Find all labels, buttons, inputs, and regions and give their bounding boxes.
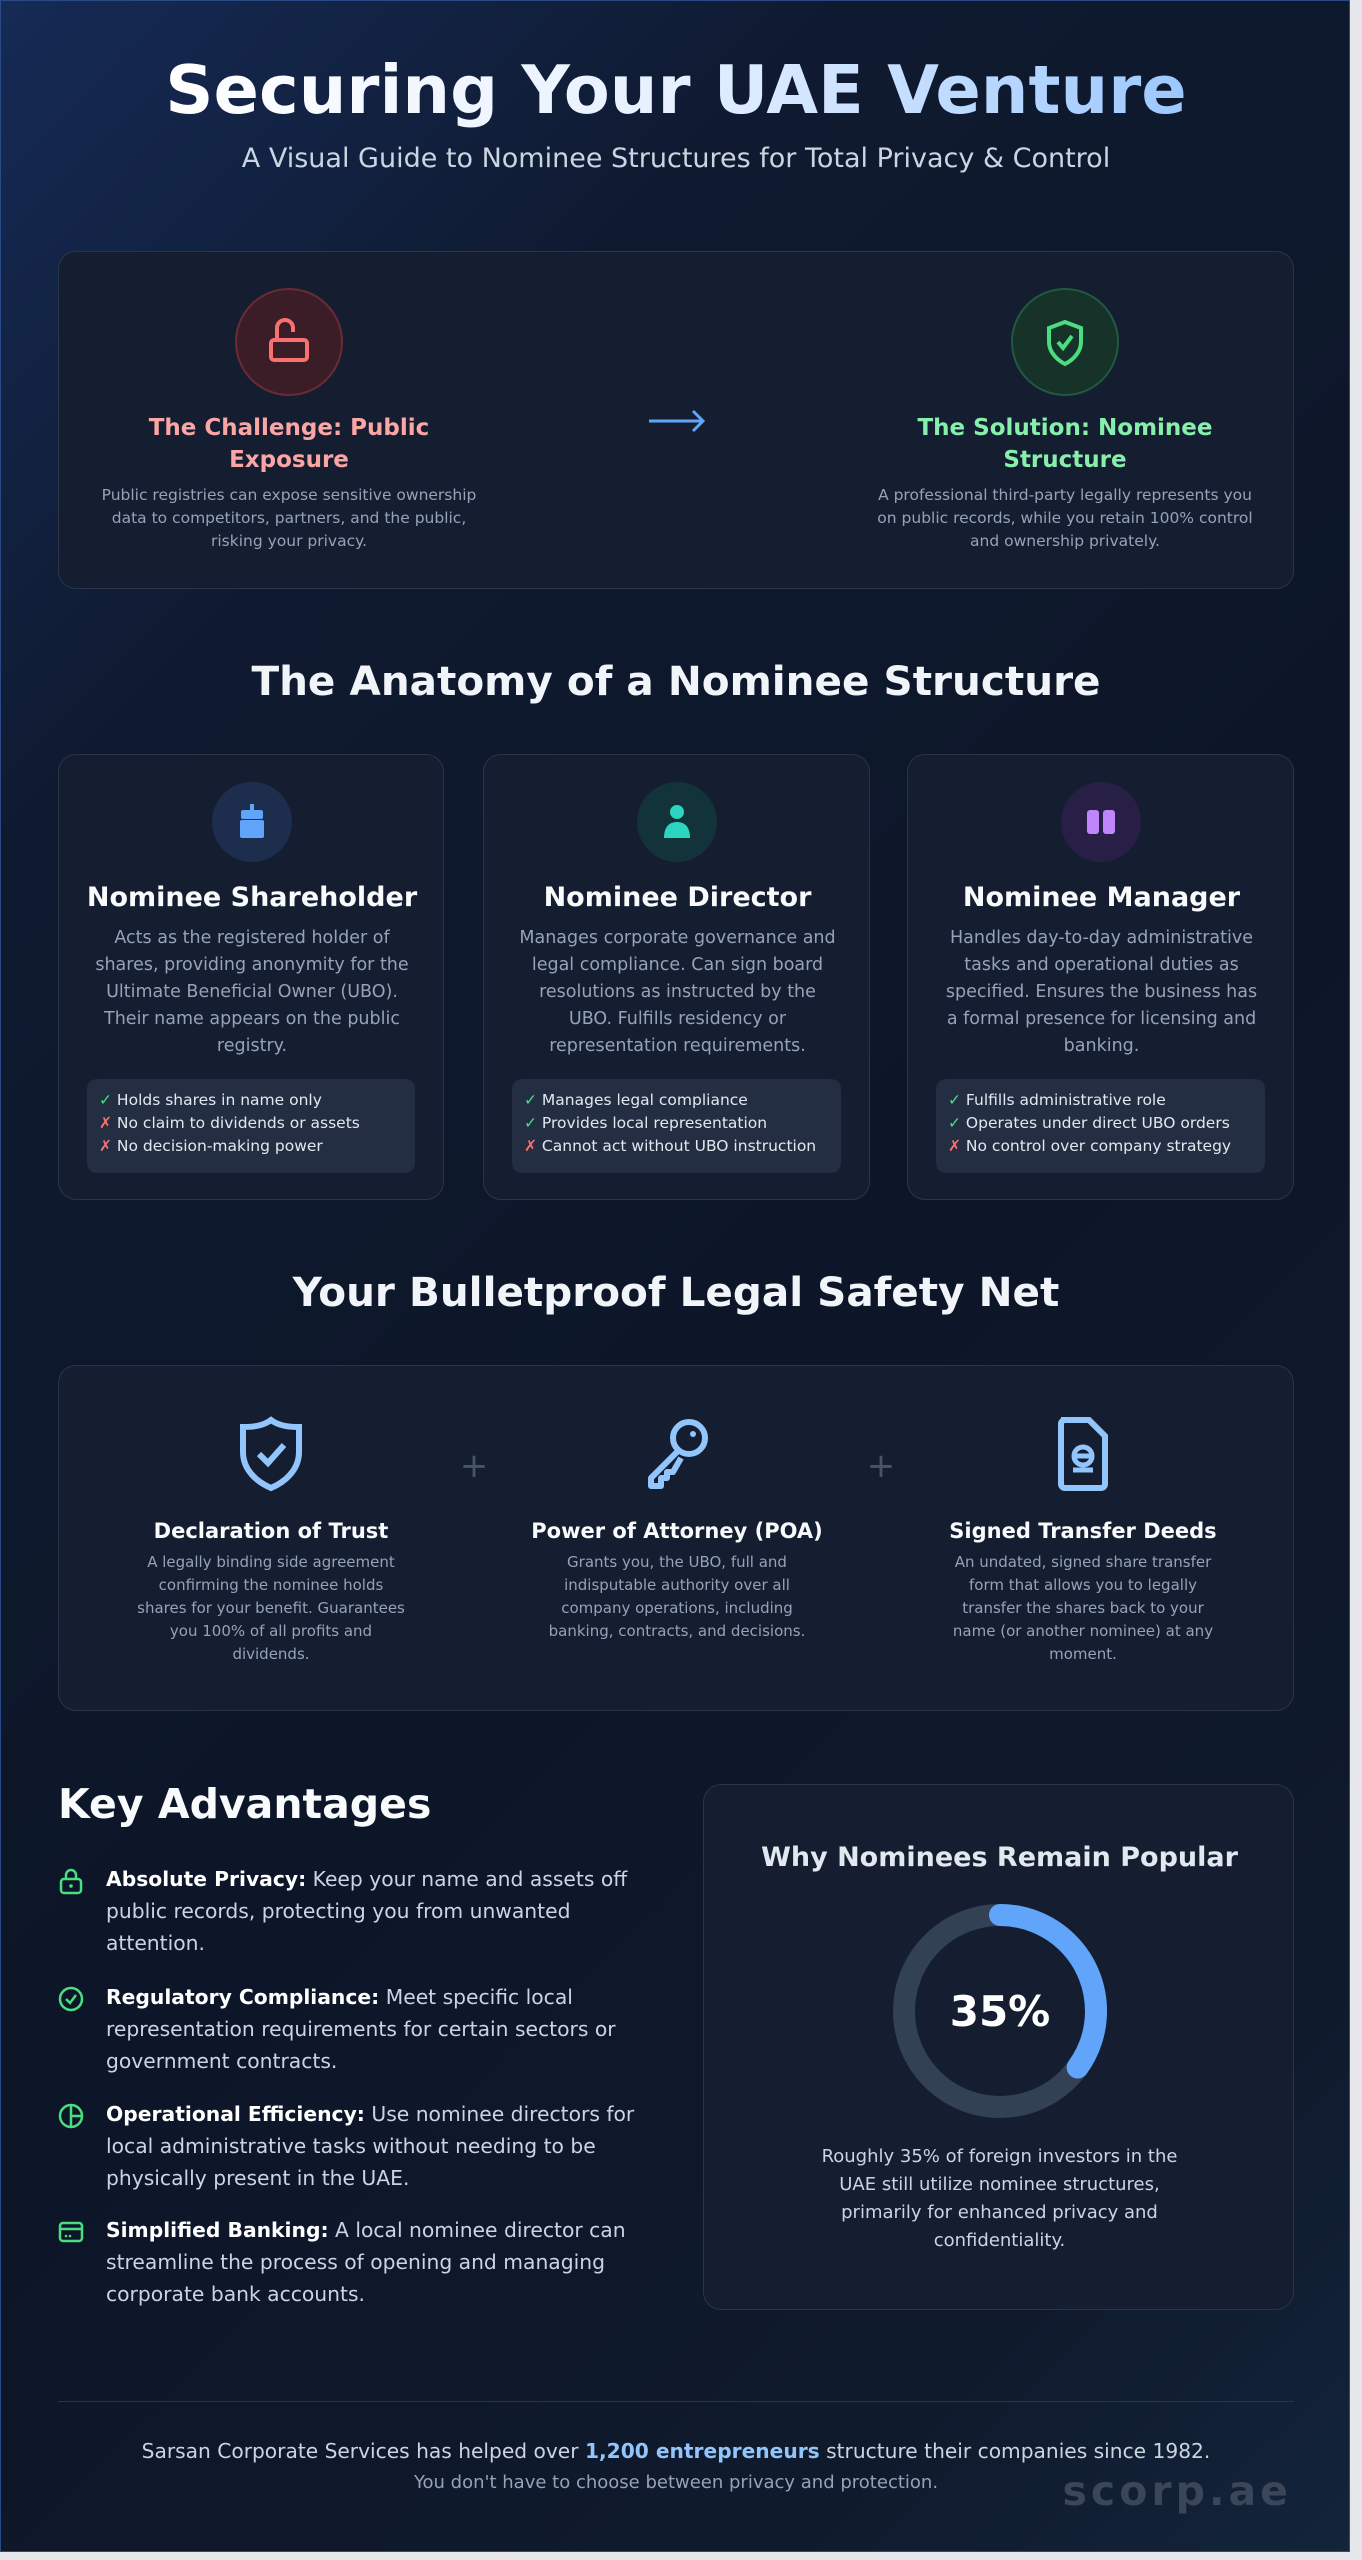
- icon: person: [637, 782, 717, 862]
- column: transfer deeds: form that allows you to legally: [969, 1576, 1197, 1594]
- icon: open lock: [235, 288, 343, 396]
- description: [519, 928, 836, 1056]
- advantage: compliance: Regulatory Compliance: Meet specific local representation requirements for certain sectors or government contracts.: [106, 1985, 616, 2073]
- checklist: ✓ Provides local representation: [524, 1114, 767, 1132]
- description: UBO. Fulfills residency or: [569, 1009, 786, 1029]
- description: representation requirements.: [549, 1036, 806, 1056]
- description: legal compliance. Can sign board: [532, 955, 823, 975]
- plus: +: [867, 1446, 895, 1486]
- description: Ultimate Beneficial Owner (UBO).: [106, 982, 398, 1002]
- solution heading: The Solution: Nominee: [917, 415, 1213, 441]
- solution heading: [917, 415, 1213, 473]
- solution heading: Structure: [1003, 447, 1127, 473]
- checklist: ✓ Manages legal compliance: [524, 1091, 748, 1109]
- checklist: ✗ Cannot act without UBO instruction: [524, 1137, 816, 1155]
- description: Acts as the registered holder of: [114, 928, 390, 948]
- column: power of attorney: indisputable authority over all: [564, 1576, 790, 1594]
- description: [95, 928, 409, 1056]
- column: declaration of trust: confirming the nominee holds: [159, 1576, 383, 1594]
- checklist: [936, 1079, 1265, 1173]
- description: shares, providing anonymity for the: [95, 955, 409, 975]
- chart caption: Roughly 35% of foreign investors in the UAE still utilize nominee structures, primarily for enhanced privacy and confidentiality.: [822, 2146, 1177, 2251]
- description: [946, 928, 1257, 1056]
- icon: document: [1058, 1417, 1108, 1491]
- heading: key advantages: Key Advantages: [58, 1780, 431, 1828]
- title: Nominee Director: [544, 882, 811, 913]
- watermark: scorp.ae: scorp.ae: [1062, 2467, 1292, 2515]
- icon: book: [1061, 782, 1141, 862]
- donut chart 35%: [893, 1904, 1107, 2118]
- heading: anatomy: The Anatomy of a Nominee Structure: [251, 657, 1101, 705]
- icon: shield: [240, 1416, 302, 1492]
- column: declaration of trust: Declaration of Trust: [154, 1519, 388, 1543]
- donut chart 35%: 35%: [950, 1987, 1050, 2036]
- panel title: Why Nominees Remain Popular: [761, 1842, 1238, 1873]
- checklist: [512, 1079, 841, 1173]
- checklist: ✗ No claim to dividends or assets: [99, 1114, 360, 1132]
- description: registry.: [217, 1036, 287, 1056]
- checklist: [87, 1079, 415, 1173]
- challenge text: Public registries can expose sensitive ownership data to competitors, partners, and the public, risking your privacy.: [102, 486, 476, 550]
- panel: nominee manager: [907, 754, 1294, 1200]
- column: transfer deeds: moment.: [1049, 1645, 1117, 1663]
- checklist: ✗ No decision-making power: [99, 1137, 323, 1155]
- column: power of attorney: Grants you, the UBO, full and: [567, 1553, 787, 1571]
- solution text: A professional third-party legally represents you on public records, while you retain 100% control and ownership privately.: [877, 486, 1253, 550]
- description: specified. Ensures the business has: [946, 982, 1257, 1002]
- panel: challenge vs solution: [58, 251, 1294, 589]
- column: power of attorney: company operations, including: [561, 1599, 793, 1617]
- checklist: ✓ Holds shares in name only: [99, 1091, 322, 1109]
- icon: shield check: [1011, 288, 1119, 396]
- description: banking.: [1064, 1036, 1139, 1056]
- column: transfer deeds: [949, 1519, 1217, 1663]
- title: Securing Your UAE Venture: [165, 51, 1187, 129]
- advantage: banking: Simplified Banking: A local nominee director can streamline the process of opening and managing corporate bank accounts.: [106, 2218, 626, 2306]
- icon: key: [648, 1419, 708, 1489]
- footer text: Sarsan Corporate Services has helped over 1,200 entrepreneurs structure their companies since 1982.: [142, 2439, 1210, 2463]
- description: Their name appears on the public: [104, 1009, 400, 1029]
- advantage: privacy: Absolute Privacy: Keep your name and assets off public records, protecting you from unwanted attention.: [106, 1867, 627, 1955]
- description: tasks and operational duties as: [964, 955, 1239, 975]
- checklist: ✓ Operates under direct UBO orders: [948, 1114, 1230, 1132]
- plus: +: [460, 1446, 488, 1486]
- heading: safety net: Your Bulletproof Legal Safety Net: [293, 1268, 1059, 1316]
- column: declaration of trust: A legally binding side agreement: [147, 1553, 395, 1571]
- column: declaration of trust: [137, 1519, 405, 1663]
- icon: shareholder: [212, 782, 292, 862]
- panel: nominee shareholder: [58, 754, 444, 1200]
- challenge heading: Exposure: [229, 447, 349, 473]
- panel: safety net: [58, 1365, 1294, 1711]
- arrow: [649, 410, 705, 432]
- panel: why nominees remain popular: [703, 1784, 1294, 2310]
- description: Handles day-to-day administrative: [950, 928, 1253, 948]
- column: declaration of trust: you 100% of all profits and: [170, 1622, 372, 1640]
- column: declaration of trust: shares for your benefit. Guarantees: [137, 1599, 405, 1617]
- column: power of attorney: [531, 1519, 823, 1640]
- challenge heading: [148, 415, 429, 473]
- checklist: ✓ Fulfills administrative role: [948, 1091, 1166, 1109]
- column: transfer deeds: transfer the shares back to your: [962, 1599, 1204, 1617]
- column: power of attorney: Power of Attorney (POA): [531, 1519, 823, 1543]
- column: transfer deeds: An undated, signed share transfer: [955, 1553, 1211, 1571]
- description: resolutions as instructed by the: [539, 982, 816, 1002]
- title: Nominee Manager: [963, 882, 1240, 913]
- description: a formal presence for licensing and: [947, 1009, 1256, 1029]
- challenge heading: The Challenge: Public: [149, 415, 429, 441]
- description: Manages corporate governance and: [519, 928, 836, 948]
- checklist: ✗ No control over company strategy: [948, 1137, 1231, 1155]
- advantage: efficiency: Operational Efficiency: Use nominee directors for local administrative tasks without needing to be physically present in the UAE.: [106, 2102, 634, 2190]
- column: transfer deeds: name (or another nominee) at any: [953, 1622, 1213, 1640]
- subtitle: A Visual Guide to Nominee Structures for Total Privacy & Control: [242, 143, 1110, 174]
- footer tagline: You don't have to choose between privacy and protection.: [414, 2472, 938, 2493]
- title: Nominee Shareholder: [87, 882, 417, 913]
- column: transfer deeds: Signed Transfer Deeds: [949, 1519, 1217, 1543]
- panel: nominee director: [483, 754, 870, 1200]
- column: power of attorney: banking, contracts, and decisions.: [549, 1622, 805, 1640]
- column: declaration of trust: dividends.: [232, 1645, 310, 1663]
